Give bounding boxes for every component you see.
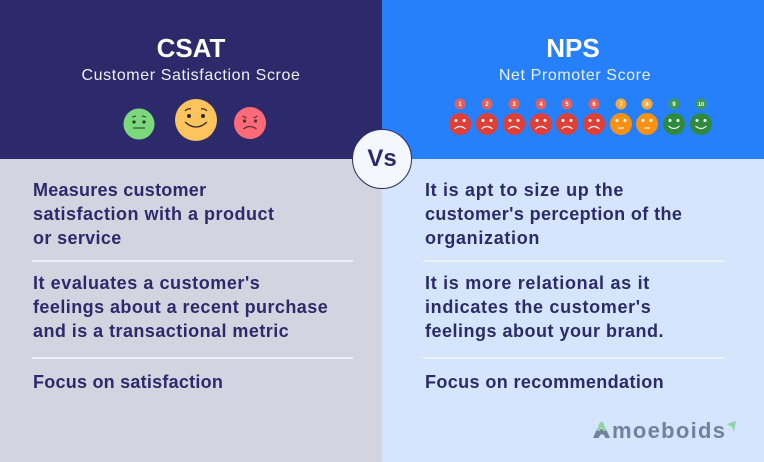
icon: rating 10 <box>690 98 712 135</box>
logo letter A <box>593 422 610 438</box>
NPS point 3: Focus on recommendation <box>425 372 664 392</box>
CSAT subtitle: Customer Satisfaction Scroe <box>82 67 300 84</box>
NPS point 1: It is apt to size up the <box>425 180 624 200</box>
NPS point 1: customer's perception of the <box>425 204 682 224</box>
icons: CSAT faces <box>124 99 266 141</box>
icon: angry face <box>234 107 266 139</box>
icon: rating 10: 10 <box>698 102 704 108</box>
panel: CSAT points <box>0 159 382 462</box>
icon: rating 8: 8 <box>645 102 649 108</box>
CSAT point 1 <box>33 180 275 248</box>
icon: rating 6: 6 <box>592 102 596 108</box>
icon: rating 9 <box>663 98 685 135</box>
panel: CSAT header <box>0 0 382 159</box>
NPS point 1 <box>425 180 682 248</box>
logo arrow <box>727 421 736 432</box>
icon: rating 3 <box>503 98 525 135</box>
icon: rating 2 <box>476 98 498 135</box>
panel: NPS header <box>382 0 764 159</box>
icon: rating 4 <box>530 98 552 135</box>
logo: Amoeboids <box>593 418 736 443</box>
NPS title: NPS <box>546 33 600 63</box>
NPS subtitle: Net Promoter Score <box>499 67 651 84</box>
CSAT title: CSAT <box>157 33 225 63</box>
NPS point 2 <box>425 273 664 341</box>
icon: rating 7: 7 <box>619 102 623 108</box>
icon: rating 2: 2 <box>485 102 489 108</box>
icon: neutral face <box>124 108 154 140</box>
CSAT point 3: Focus on satisfaction <box>33 372 223 392</box>
icon: rating 5 <box>556 98 578 135</box>
icon: rating 3: 3 <box>512 102 516 108</box>
Vs badge: Vs <box>367 145 397 172</box>
icon: rating 8 <box>636 98 658 135</box>
CSAT point 1: Measures customer <box>33 180 206 200</box>
Vs badge <box>352 129 412 189</box>
panel: NPS points <box>382 159 764 462</box>
logo wordmark: moeboids <box>612 418 726 443</box>
CSAT point 2: feelings about a recent purchase <box>33 297 328 317</box>
NPS point 2: feelings about your brand. <box>425 321 664 341</box>
icons: NPS rating scale <box>449 98 712 135</box>
icon: rating 6 <box>583 98 605 135</box>
NPS point 1: organization <box>425 228 540 248</box>
icon: rating 1: 1 <box>458 102 462 108</box>
CSAT point 1: or service <box>33 228 122 248</box>
CSAT point 2: It evaluates a customer's <box>33 273 260 293</box>
icon: rating 5: 5 <box>565 102 569 108</box>
icon: rating 7 <box>610 98 632 135</box>
icon: happy face <box>175 99 217 141</box>
NPS point 2: It is more relational as it <box>425 273 650 293</box>
CSAT point 2: and is a transactional metric <box>33 321 289 341</box>
CSAT point 2 <box>33 273 328 341</box>
icon: rating 1 <box>449 98 471 135</box>
icon: rating 4: 4 <box>539 102 543 108</box>
CSAT point 1: satisfaction with a product <box>33 204 275 224</box>
NPS point 2: indicates the customer's <box>425 297 651 317</box>
icon: rating 9: 9 <box>672 102 676 108</box>
